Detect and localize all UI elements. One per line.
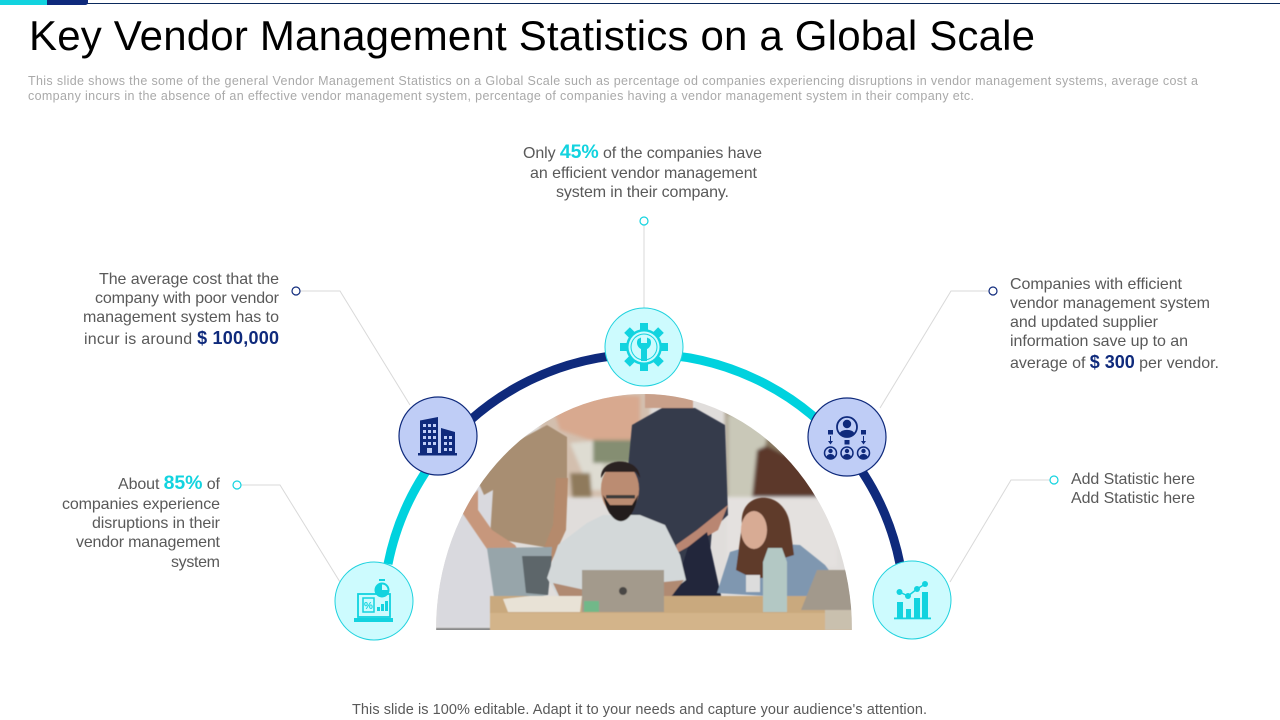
standing man dark shirt <box>644 394 694 409</box>
callout: 45 percent: system in their company. <box>556 184 729 201</box>
connector lines <box>237 221 1054 582</box>
wall art left <box>540 392 650 497</box>
callout: average cost: The average cost that the <box>99 271 279 288</box>
callout: add statistic: Add Statistic here <box>1071 471 1195 488</box>
node: laptop analytics <box>335 562 413 640</box>
callout: savings per vendor: average of $ 300 per vendor. <box>1010 352 1219 372</box>
node: buildings <box>399 397 477 475</box>
callout: average cost <box>83 271 280 348</box>
node: hierarchy <box>808 398 886 476</box>
callout: average cost: incur is around $ 100,000 <box>84 328 279 348</box>
node: gear <box>605 308 683 386</box>
standing man tan shirt <box>476 425 567 548</box>
callout: savings per vendor: vendor management system <box>1010 295 1210 312</box>
callout: add statistic <box>1071 471 1195 507</box>
callout: 45 percent: an efficient vendor management <box>530 165 758 182</box>
top accent bar <box>0 0 1280 5</box>
icon: office buildings <box>418 417 457 456</box>
right laptop <box>801 570 852 610</box>
icon: gear and wrench <box>620 323 668 371</box>
callout: 85 percent: About 85% of <box>118 472 221 494</box>
callout: 45 percent <box>523 141 762 201</box>
table <box>490 595 826 614</box>
team photo in dome <box>430 390 860 635</box>
subtitle description <box>28 74 1198 103</box>
icon: bar chart with trend <box>894 581 931 619</box>
seated man <box>547 515 686 600</box>
callout: add statistic: Add Statistic here <box>1071 490 1195 507</box>
laptop <box>582 570 664 612</box>
callout: 85 percent: vendor management <box>76 534 221 551</box>
callout: 85 percent: system <box>171 554 220 571</box>
callout: 45 percent: Only 45% of the companies have <box>523 141 762 163</box>
callout: 85 percent <box>62 472 221 571</box>
subtitle description: company incurs in the absence of an effective vendor management system, percentage of companies having a vendor management system in their company etc. <box>28 89 974 103</box>
notebook <box>503 596 582 612</box>
icon: laptop with stopwatch: % <box>364 601 373 612</box>
icon: manager and team <box>824 417 870 459</box>
woman <box>716 544 829 596</box>
callout: savings per vendor <box>1010 276 1219 372</box>
callout: average cost: company with poor vendor <box>95 290 280 307</box>
semicircular arc <box>388 354 900 564</box>
callout: savings per vendor: information save up to an <box>1010 333 1188 350</box>
title: Key Vendor Management Statistics on a Global Scale <box>29 12 1035 59</box>
callout: savings per vendor: and updated supplier <box>1010 314 1159 331</box>
wall art right <box>722 412 733 498</box>
callout: 85 percent: companies experience <box>62 496 220 513</box>
callout: savings per vendor: Companies with efficient <box>1010 276 1183 293</box>
subtitle description: This slide shows the some of the general Vendor Management Statistics on a Global Scale such as percentage od companies experiencing disruptions in vendor management systems, average cost a <box>28 74 1198 88</box>
connector dots <box>233 217 1058 489</box>
node: growth chart <box>873 561 951 639</box>
wall lower <box>436 480 496 628</box>
callout: 85 percent: disruptions in their <box>92 515 221 532</box>
footer note: This slide is 100% editable. Adapt it to your needs and capture your audience's attention. <box>352 702 927 718</box>
callout: average cost: management system has to <box>83 309 279 326</box>
bottle <box>763 548 787 612</box>
